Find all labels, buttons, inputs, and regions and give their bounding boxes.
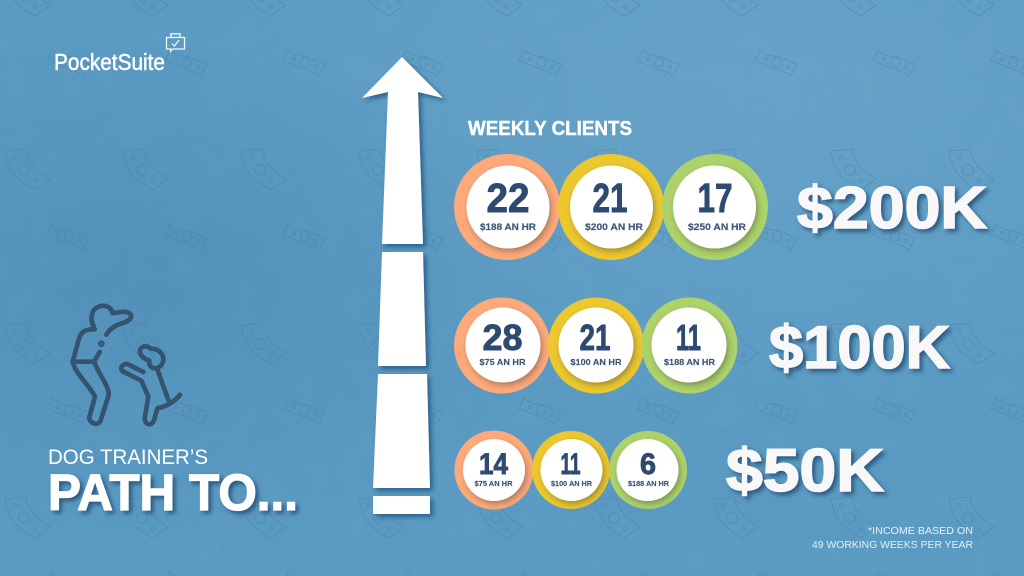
amount: $200K: $200K [797,175,987,241]
circle: 6 clients at $188: 6 [640,448,656,481]
circle: 6 clients at $188 [609,431,687,509]
circle: 28 clients at $75: 28 [482,317,522,358]
title [48,446,298,521]
circle: 21 clients at $100: 21 [580,317,610,358]
circle: 22 clients at $188: 22 [486,175,530,221]
title line 2: PATH TO... [48,464,298,521]
circle: 21 clients at $200 [558,154,664,260]
circle: 17 clients at $250: 17 [698,175,732,221]
arrow segment 4 [373,496,430,514]
circle: 11 clients at $100: 11 [560,448,580,481]
arrow: segmented upward path [362,57,443,514]
amount: $100K: $100K [769,314,950,381]
circle: 21 clients at $200: $200 AN HR [585,222,643,233]
circle: 22 clients at $188 [454,154,560,260]
circle: 6 clients at $188: $188 AN HR [628,479,670,488]
arrow segment 3 [373,374,430,488]
dog figure [121,346,180,424]
trainer figure [73,306,131,424]
circle: 11 clients at $188 [642,298,738,394]
amount: $50K: $50K [726,437,884,504]
footnote [812,525,973,551]
circle: 21 clients at $100 [548,298,644,394]
title line 1: DOG TRAINER’S [48,446,208,469]
footnote: *INCOME BASED ON [868,525,973,537]
row: $200K [454,154,987,260]
circle: 21 clients at $200: 21 [592,175,628,221]
circle: 14 clients at $75: 14 [479,448,508,481]
circle: 11 clients at $188: $188 AN HR [664,357,715,367]
row: $100K [454,298,950,394]
circle: 11 clients at $188: 11 [676,317,701,358]
circle: 17 clients at $250 [662,154,768,260]
circle: 11 clients at $100 [532,431,610,509]
footnote: 49 WORKING WEEKS PER YEAR [812,539,973,551]
circle: 21 clients at $100: $100 AN HR [570,357,622,367]
arrow head segment [362,57,443,244]
circle: 17 clients at $250: $250 AN HR [688,222,746,233]
row: $50K [454,430,884,510]
icon: dog trainer and dog [73,306,180,424]
circle: 28 clients at $75: $75 AN HR [480,357,526,367]
heading: weekly clients: WEEKLY CLIENTS [468,118,632,140]
logo: PocketSuite [54,34,184,75]
circle: 14 clients at $75 [454,430,534,510]
logo: PocketSuite: PocketSuite [54,49,165,75]
icon: briefcase check [166,34,184,52]
arrow segment 2 [378,252,426,366]
circle: 14 clients at $75: $75 AN HR [474,479,513,488]
circle: 22 clients at $188: $188 AN HR [480,222,536,233]
circle: 11 clients at $100: $100 AN HR [551,479,593,488]
circle: 28 clients at $75 [454,298,550,394]
